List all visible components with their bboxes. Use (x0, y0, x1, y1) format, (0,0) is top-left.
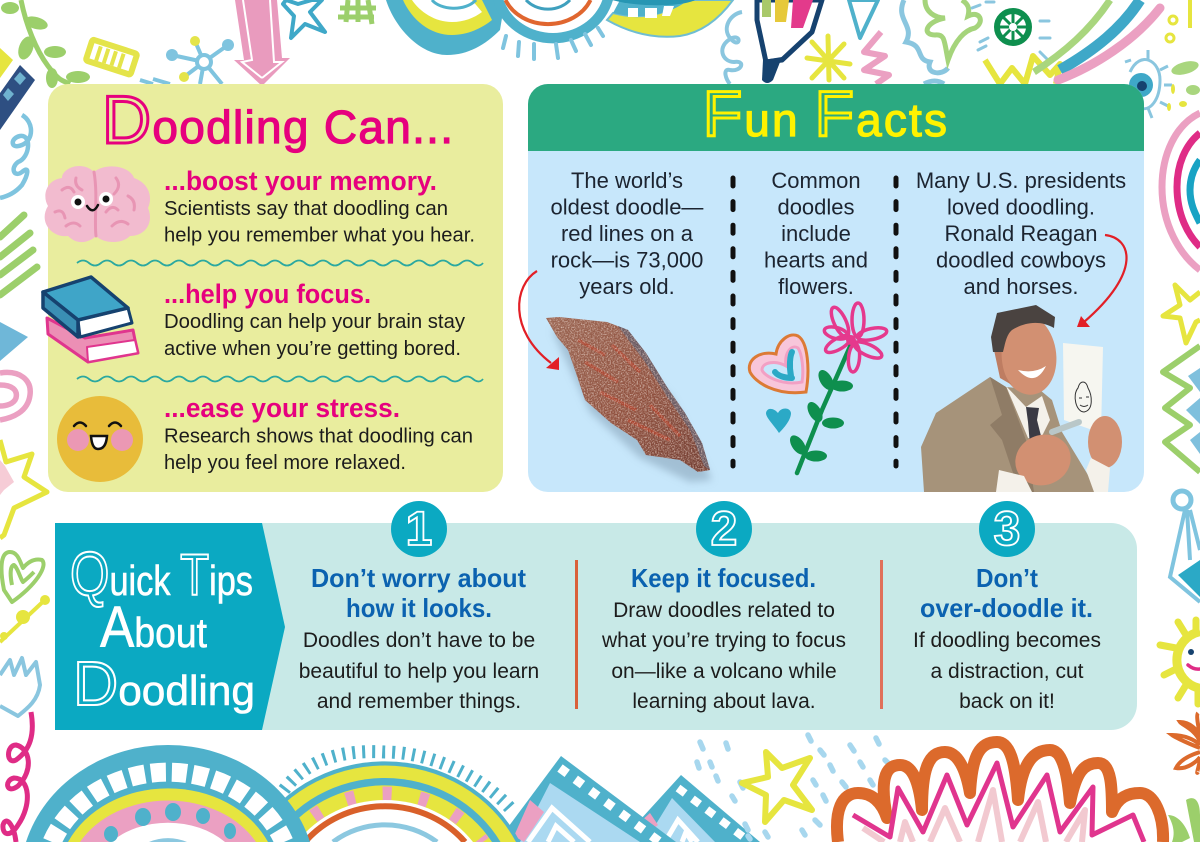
fact 1 text: years old. (579, 274, 675, 299)
tip 3 heading (920, 563, 1093, 623)
bottom doodles: center rainbow (250, 761, 520, 842)
top doodles: eye (1125, 50, 1172, 118)
top doodles: squiggle (722, 12, 742, 84)
tip 2 number: 2 (711, 503, 737, 556)
heading: quick tips about doodling: Doodling (73, 650, 255, 719)
tip 1 text: Doodles don’t have to be (303, 629, 535, 652)
benefit 2 text: Doodling can help your brain stay (164, 311, 466, 333)
icon: brain (45, 166, 150, 242)
benefit 3 text: Research shows that doodling can (164, 426, 473, 448)
left doodles: blue squiggle (0, 115, 31, 198)
tip 1 heading (311, 563, 526, 623)
left doodles: blue triangle (0, 322, 28, 361)
tip 3 text (913, 629, 1101, 713)
benefit 3 text (164, 426, 473, 474)
tip 1 text (299, 629, 539, 713)
right doodles: sun (1160, 620, 1200, 704)
left doodles: hand (0, 658, 40, 716)
top doodles: dashes (972, 2, 1050, 59)
top doodles: snowflake (140, 36, 234, 84)
quick tips banner (55, 523, 285, 730)
right doodles: hanging diamond (1170, 491, 1200, 602)
photo: ronald reagan holding a doodle (921, 305, 1122, 493)
fact 3 text: Ronald Reagan (945, 221, 1097, 246)
benefit 1 text (164, 198, 475, 246)
heading: fun facts: Fun Facts (703, 78, 947, 150)
left doodles: magenta curl (3, 712, 32, 842)
fact 2 text: hearts and (764, 248, 868, 272)
heading: quick tips about doodling: Quick Tips (70, 540, 253, 609)
top doodles: green hash (338, 0, 376, 24)
top doodles: vine (1, 0, 90, 88)
left doodles: yellow star (0, 440, 47, 538)
right doodles: yellow star (1163, 285, 1200, 343)
top doodles: crown (985, 56, 1060, 84)
tip 3 text: a distraction, cut (931, 660, 1084, 683)
fact 2 text: doodles (777, 194, 855, 220)
fun facts header bar (528, 84, 1144, 151)
tip 2 text: learning about lava. (632, 690, 816, 713)
fact 3 text (916, 168, 1126, 299)
fact 1 text: red lines on a (561, 221, 694, 246)
tip 2 text: what you’re trying to focus (601, 629, 846, 652)
benefit 1 text: help you remember what you hear. (164, 224, 475, 246)
top doodles: rainbow center (493, 0, 613, 59)
right doodles: concentric arcs (1162, 113, 1200, 270)
benefit 2 text (164, 311, 466, 360)
benefit 3 text: help you feel more relaxed. (164, 452, 406, 474)
top doodles: pink zigzag (864, 32, 889, 84)
bottom doodles: left rainbow (26, 745, 310, 842)
benefit 2 text: active when you’re getting bored. (164, 338, 461, 360)
fact 1 text: The world’s (571, 168, 683, 193)
tip 2 number (696, 501, 752, 557)
heading: quick tips about doodling: About (100, 595, 207, 660)
tip 2 text: on—like a volcano while (611, 660, 837, 683)
left doodles: green stripes (0, 215, 37, 295)
tip 1 text: and remember things. (317, 690, 521, 713)
tip 3 text: If doodling becomes (913, 629, 1101, 652)
icon: books (43, 277, 138, 362)
arrow: to doodle (1077, 235, 1127, 327)
tip 2 text (601, 599, 846, 713)
right doodles: green zigzag (1163, 346, 1200, 472)
heading: doodling can: Doodling Can... (102, 82, 453, 158)
icon: hearts (749, 335, 808, 433)
benefit 2 heading: ...help you focus. (164, 279, 371, 309)
benefit 1 heading: ...boost your memory. (164, 166, 437, 196)
top doodles: rainbow right (607, 0, 733, 37)
tip 1 text: beautiful to help you learn (299, 660, 539, 683)
fact 2 text (764, 168, 868, 299)
tip 1 heading: Don’t worry about (311, 563, 526, 593)
top doodles: dots and leaves (1166, 0, 1200, 111)
top doodles: pink arrow (234, 0, 290, 86)
tip 1 heading: how it looks. (346, 593, 492, 623)
fact 1 text: oldest doodle— (551, 194, 703, 220)
bottom doodles: orange scallop flower (837, 742, 1163, 842)
tip 3 text: back on it! (959, 690, 1055, 713)
left doodles: yellow chain (0, 595, 50, 642)
tip 2 text: Draw doodles related to (613, 599, 835, 622)
right doodles: green plant (1168, 798, 1200, 842)
right doodles: orange flower (1172, 713, 1200, 773)
tip 1 number: 1 (406, 503, 432, 556)
fact 1 text (551, 168, 703, 299)
icon: pencil (757, 0, 822, 83)
fact 2 text: flowers. (778, 274, 854, 299)
bottom doodles: mountains (497, 756, 760, 842)
top doodles: blue scallop (902, 0, 948, 84)
tip 1 number (391, 501, 447, 557)
tip 3 heading: over-doodle it. (920, 593, 1093, 623)
icon: flower (787, 303, 888, 473)
top doodles: green flower (925, 0, 980, 60)
panel: doodling can (43, 82, 503, 492)
left doodles: pink swirl (0, 372, 30, 420)
heading: quick tips about doodling (70, 540, 255, 719)
fact 3 text: Many U.S. presidents (916, 168, 1126, 193)
fact 3 text: loved doodling. (947, 194, 1095, 220)
top doodles: green wheel (997, 11, 1029, 43)
fact 1 text: rock—is 73,000 (551, 248, 703, 272)
tip 3 number (979, 501, 1035, 557)
top doodles: teal triangle (849, 0, 878, 38)
image: rock (546, 317, 712, 482)
panel: fun facts (519, 78, 1144, 493)
bottom doodles: center rainbow ticks (284, 752, 510, 808)
top doodles: teal star (283, 0, 325, 38)
tip 2 heading: Keep it focused. (631, 563, 816, 593)
icon: smiley (57, 396, 143, 482)
top doodles: yellow strip (86, 39, 137, 75)
top doodles: diagonal stripes (1034, 0, 1160, 80)
tip 3 heading: Don’t (976, 563, 1038, 593)
bottom doodles: yellow star (742, 752, 812, 822)
benefit 1 text: Scientists say that doodling can (164, 198, 448, 220)
left doodles: green heart (2, 552, 44, 602)
panel: quick tips (55, 501, 1137, 730)
bottom doodles: blue dashes (697, 735, 890, 839)
fact 2 text: include (781, 221, 851, 246)
fact 3 text: and horses. (964, 274, 1078, 299)
top doodles: rainbow left (386, 0, 505, 55)
tip 3 number: 3 (994, 503, 1020, 556)
arrow: to rock (519, 271, 559, 370)
left doodles: ruler (0, 65, 35, 130)
top doodles: asterisk (807, 36, 850, 80)
benefit 3 heading: ...ease your stress. (164, 393, 400, 423)
left doodles: yellow tag (0, 48, 13, 78)
fact 2 text: Common (771, 168, 861, 193)
fact 3 text: doodled cowboys (936, 248, 1106, 272)
